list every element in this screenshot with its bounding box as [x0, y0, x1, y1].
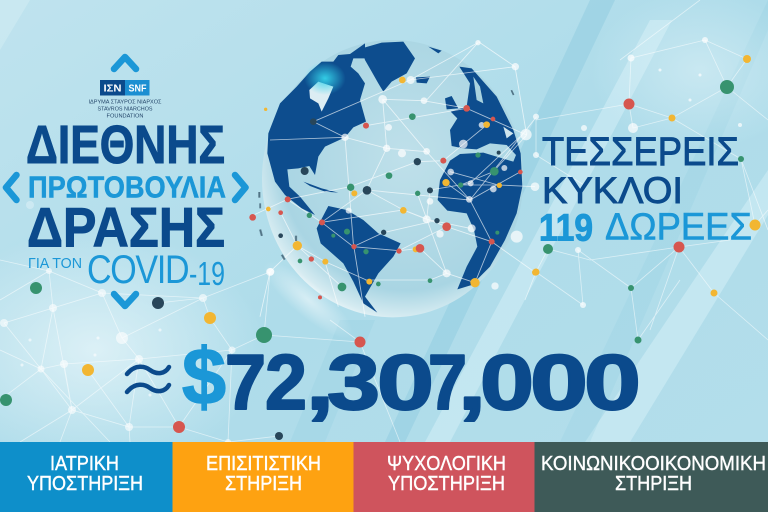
logo: FOUNDATION [106, 114, 144, 120]
network lines: left [0, 260, 400, 442]
category bar: food: ΕΠΙΣΙΤΙΣΤΙΚΗ [206, 453, 321, 475]
network nodes: right [533, 37, 742, 308]
logo: ΙΔΡΥΜΑ ΣΤΑΥΡΟΣ ΝΙΑΡΧΟΣ [88, 100, 162, 106]
title: ΓΙΑ ΤΟΝ: ΓΙΑ ΤΟΝ [28, 255, 82, 272]
amount: 72,307,000: 7 [225, 338, 266, 426]
decorative coloured dots [0, 55, 760, 440]
amount: 72,307,000: , [306, 338, 334, 426]
category bar: psychological [354, 442, 534, 512]
amount: 72,307,000: 0 [480, 338, 534, 426]
globe [249, 40, 539, 349]
amount: 72,307,000: 3 [327, 338, 380, 426]
category bar: psychological: ΥΠΟΣΤΗΡΙΞΗ [388, 473, 505, 495]
stat: 119: 119 [539, 208, 593, 250]
globe sphere [262, 40, 523, 317]
heading: ΤΕΣΣΕΡΕΙΣ: ΤΕΣΣΕΡΕΙΣ [542, 130, 739, 174]
globe network lines [250, 42, 537, 317]
title: ΠΡΩΤΟΒΟΥΛΙΑ: ΠΡΩΤΟΒΟΥΛΙΑ [28, 170, 226, 204]
amount: 72,307,000: 0 [377, 338, 434, 426]
category bar: socioeconomic [534, 442, 768, 512]
amount: 72,307,000: , [458, 338, 486, 426]
amount: 72,307,000: 7 [428, 338, 467, 426]
title: COVID-19: -19 [189, 255, 225, 292]
title: ΔΡΑΣΗΣ: ΔΡΑΣΗΣ [27, 196, 225, 258]
chevron down [114, 294, 136, 306]
amount: 72,307,000: 0 [530, 338, 588, 426]
category bar: psychological: ΨΥΧΟΛΟΓΙΚΗ [387, 453, 506, 475]
amount: 72,307,000 [225, 338, 641, 426]
title: COVID-19: COVID [87, 246, 189, 292]
continents [267, 42, 522, 313]
chevron up [114, 57, 136, 69]
amount: dollar sign: $ [182, 332, 226, 421]
approx symbol [127, 367, 169, 392]
globe dots [249, 40, 539, 299]
category bar: medical: ΙΑΤΡΙΚΗ [50, 453, 119, 475]
category bar: socioeconomic: ΣΤΗΡΙΞΗ [615, 473, 692, 495]
chevron left [6, 175, 16, 200]
arctic ice and glow [254, 62, 513, 349]
heading: ΚΥΚΛΟΙ: ΚΥΚΛΟΙ [542, 170, 683, 211]
category bar: medical [0, 442, 172, 512]
network lines: right [525, 0, 768, 340]
chevron right [235, 175, 246, 200]
logo: SNF [128, 84, 146, 94]
category bar: food [172, 442, 354, 512]
title: ΔΙΕΘΝΗΣ: ΔΙΕΘΝΗΣ [26, 115, 225, 175]
amount: 72,307,000: 0 [584, 338, 641, 426]
category bar: food: ΣΤΗΡΙΞΗ [225, 473, 302, 495]
logo [88, 80, 162, 120]
amount: 72,307,000: 2 [265, 338, 307, 426]
category bar: medical: ΥΠΟΣΤΗΡΙΞΗ [27, 473, 143, 495]
logo: ΙΣΝ [104, 84, 122, 94]
stat label: ΔΩΡΕΕΣ: ΔΩΡΕΕΣ [605, 206, 752, 248]
network nodes: left [0, 201, 274, 445]
logo: STAVROS NIARCHOS [98, 106, 153, 112]
